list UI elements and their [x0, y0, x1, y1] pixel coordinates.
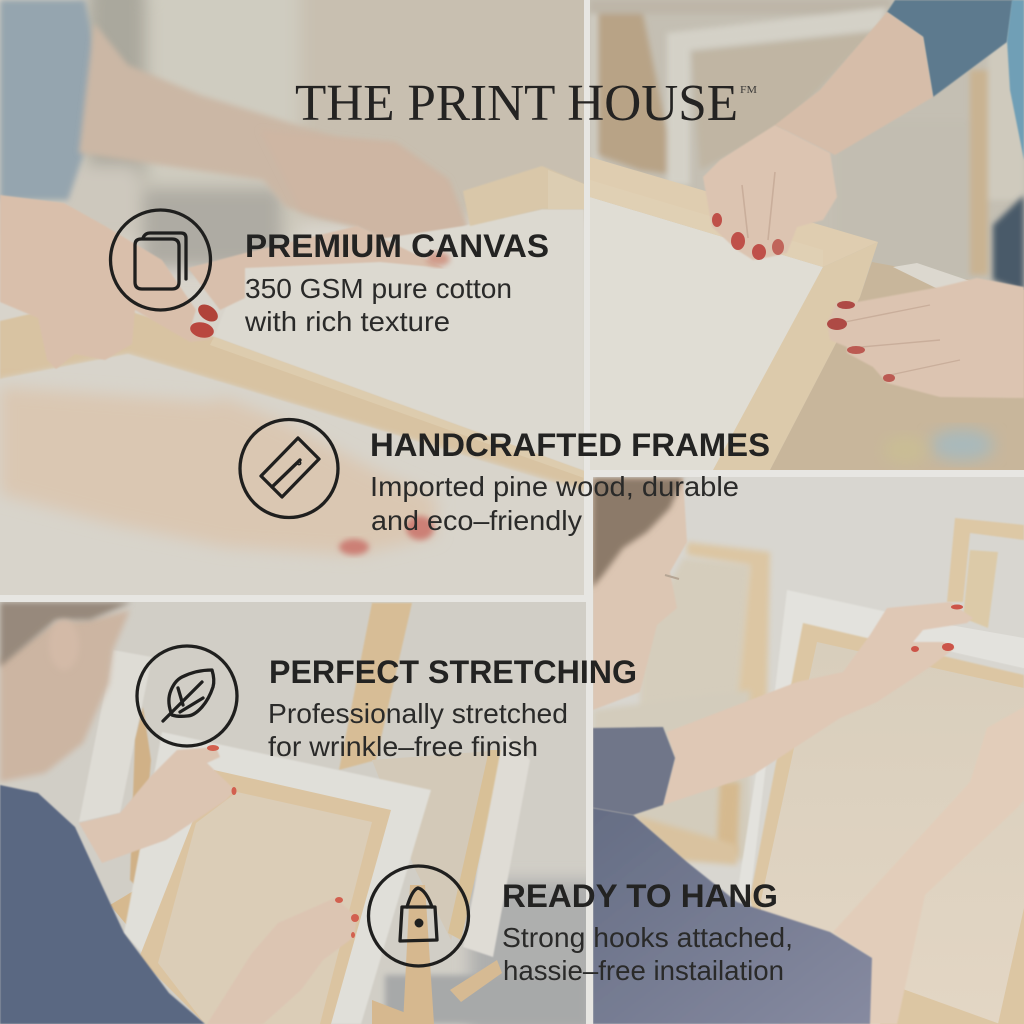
heading: ready to hang: READY TO HANG [502, 878, 778, 914]
feature: ready to hang [368, 866, 793, 986]
text: ready to hang description: hassie–free instailation [503, 955, 784, 986]
heading: premium canvas: PREMIUM CANVAS [245, 228, 549, 264]
upper blurred arm and hand [76, 26, 376, 234]
shirt [593, 808, 872, 1024]
icon: hanging lock [368, 866, 468, 966]
canvas [590, 197, 823, 470]
feature: handcrafted frames [240, 420, 770, 536]
icon: wood frame [240, 420, 338, 518]
background frames [640, 558, 748, 704]
text: handcrafted frames description: Imported pine wood, durable [370, 471, 739, 502]
heading: perfect stretching: PERFECT STRETCHING [269, 654, 637, 690]
upper hand [0, 195, 214, 369]
shirt [0, 785, 205, 1024]
head and hair [0, 610, 130, 782]
background easels [339, 603, 412, 770]
text: premium canvas description: with rich texture [244, 306, 450, 337]
raised arm and hand [663, 602, 973, 805]
text: premium canvas description: 350 GSM pure cotton [245, 273, 512, 304]
white front frame [124, 732, 431, 1024]
text: perfect stretching description: for wrinkle–free finish [268, 731, 538, 762]
feature: perfect stretching [137, 646, 637, 762]
arm and upper hand [79, 747, 235, 863]
white frame [738, 590, 948, 896]
text: perfect stretching description: Professionally stretched [268, 698, 568, 729]
right hand [827, 278, 1024, 398]
top hand [703, 125, 837, 260]
wood frame strip [0, 306, 584, 492]
feature: premium canvas [110, 210, 549, 337]
text: ready to hang description: Strong hooks attached, [502, 922, 793, 953]
thumb over canvas [188, 226, 444, 310]
title: FM [740, 84, 757, 96]
right surface [770, 262, 1024, 470]
icon: leaf [137, 646, 237, 746]
title: THE PRINT HOUSE [295, 75, 738, 132]
heading: handcrafted frames: HANDCRAFTED FRAMES [370, 427, 770, 463]
canvas surface [244, 209, 584, 279]
sleeve and arm [887, 0, 1013, 97]
lower blurred hand [0, 387, 436, 555]
photo panel: hands pressing canvas on frame [0, 0, 600, 595]
lower right arm [836, 929, 915, 1024]
text: handcrafted frames description: and eco–friendly [371, 505, 582, 536]
lower hand [268, 910, 356, 1018]
icon: canvas sheets [110, 210, 210, 310]
head [593, 478, 687, 710]
photo panel: hands holding frame corner [590, 0, 1024, 470]
photo panel: woman stretching canvas on easel [592, 477, 1024, 1024]
photo panel: woman holding white frame [0, 602, 600, 1024]
